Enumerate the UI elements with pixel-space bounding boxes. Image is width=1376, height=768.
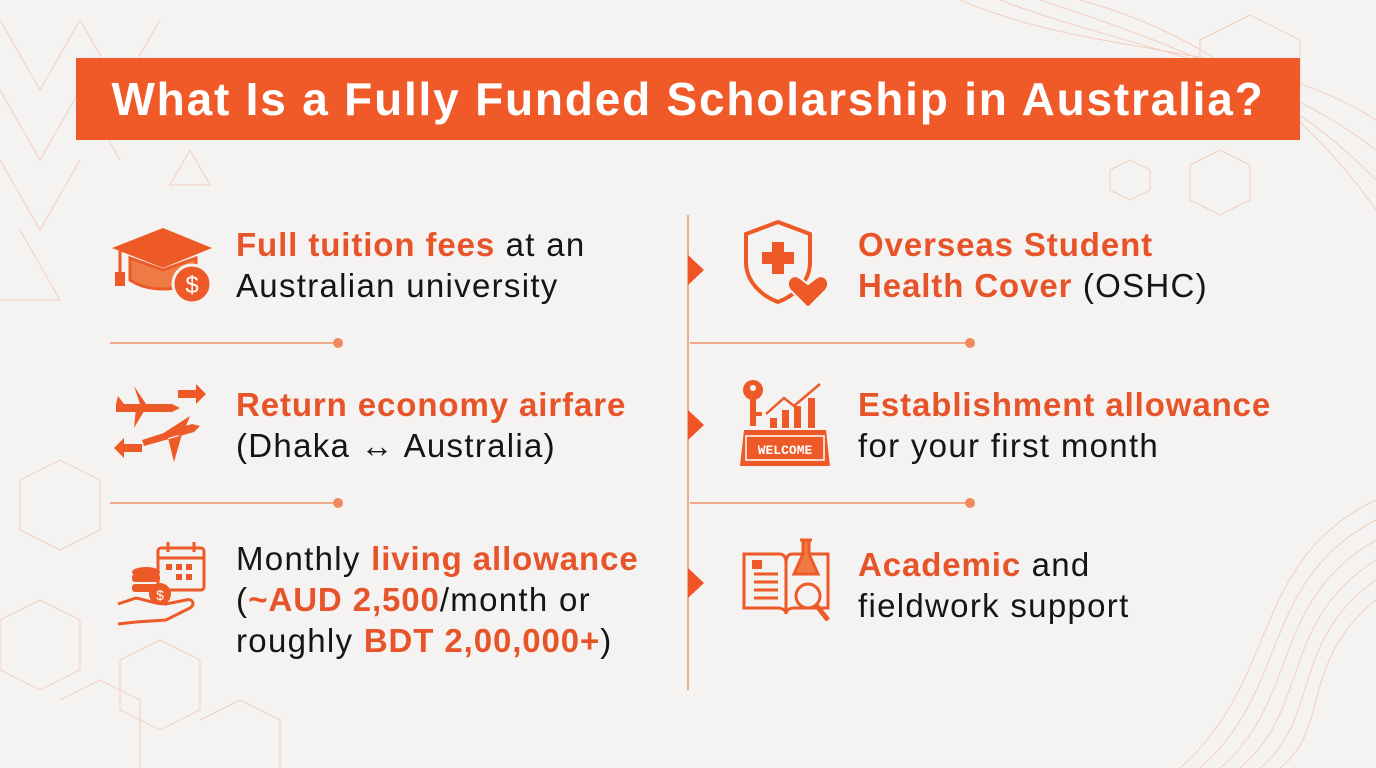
text: airfare: Return economy airfare [236,386,626,423]
text: airfare: (Dhaka ↔ Australia) [236,427,556,464]
text: OSHC [858,226,1208,304]
text: establishment: for your first month [858,427,1159,464]
text: academic: Academic and [858,546,1091,583]
text: tuition [236,226,586,304]
text: airfare [236,386,626,464]
icon: hand coins calendar [118,542,206,626]
icon: welcome key chart: WELCOME [758,443,813,458]
text: tuition: Australian university [236,267,559,304]
text: living allowance: (~AUD 2,500/month or [236,581,591,618]
icon: graduation cap with dollar: $ [185,272,199,299]
text: living allowance: Monthly living allowance [236,540,639,577]
icon: airplanes [114,384,206,462]
text: living allowance [236,540,639,659]
text: OSHC: Health Cover (OSHC) [858,267,1208,304]
text: OSHC: Overseas Student [858,226,1153,263]
text: establishment: Establishment allowance [858,386,1271,423]
text: establishment [858,386,1271,464]
icon: shield health [744,220,828,306]
title banner: What Is a Fully Funded Scholarship in Australia? [111,73,1265,125]
row dividers [110,338,975,508]
text: tuition: Full tuition fees at an [236,226,586,263]
icon: graduation cap with dollar [112,228,212,302]
icon: book flask magnifier [742,538,830,622]
text: academic: fieldwork support [858,587,1130,624]
icon: welcome key chart [740,380,830,466]
text: academic [858,546,1130,624]
text: living allowance: roughly BDT 2,00,000+) [236,622,613,659]
icon: hand coins calendar: $ [156,587,164,603]
center vertical divider with markers [687,215,704,690]
title banner [76,58,1300,140]
